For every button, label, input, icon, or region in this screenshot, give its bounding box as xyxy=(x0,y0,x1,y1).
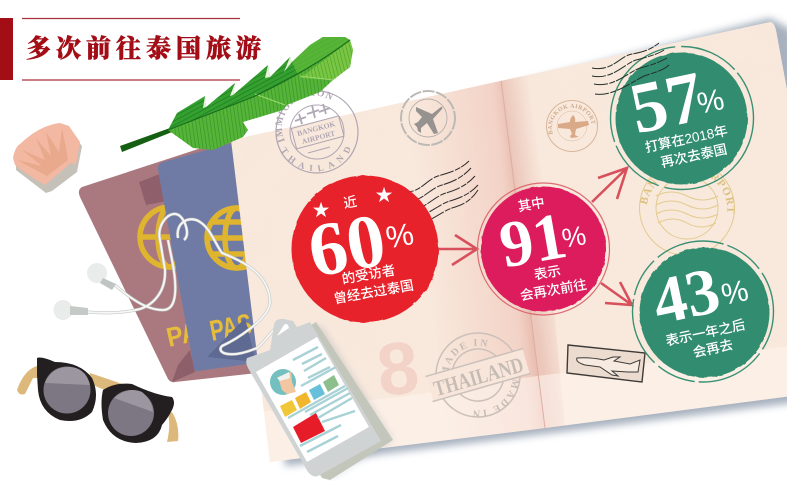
91 percent: 91 xyxy=(494,199,572,282)
leaf lower tip xyxy=(300,40,353,80)
green ring xyxy=(632,241,774,382)
green circle xyxy=(640,248,770,378)
43 percent: % xyxy=(718,274,751,312)
green caption: 再次去泰国 xyxy=(659,141,729,170)
leaf notches xyxy=(203,57,292,108)
stamp: yellow wave xyxy=(639,172,735,255)
red caption xyxy=(329,259,415,306)
earphone cable xyxy=(88,214,288,354)
stamp: made in Thailand xyxy=(425,332,531,418)
red tab xyxy=(0,18,13,80)
profile lines xyxy=(293,347,336,386)
stamp: made in Thailand: THAILAND xyxy=(431,352,526,401)
postmark: near red circle xyxy=(400,161,478,224)
left earbud xyxy=(87,263,107,283)
near label: 近 xyxy=(342,194,359,211)
green circle xyxy=(616,52,748,184)
stat: 57% xyxy=(592,43,754,190)
page base xyxy=(231,22,787,462)
stat: near 60% xyxy=(292,176,438,322)
stat: near 60%: ★ xyxy=(375,183,393,207)
red caption: 曾经去过泰国 xyxy=(332,277,415,306)
stamp: grey plane xyxy=(401,91,455,145)
red passport label: PA xyxy=(164,316,202,353)
stat: 91% xyxy=(478,183,610,315)
stamp: tan plane: BANGKOK AIRPORT xyxy=(548,104,596,135)
leaf lower half xyxy=(168,40,353,150)
icon: earphones xyxy=(54,214,288,354)
passport: blue xyxy=(158,143,267,371)
stamp: made in Thailand: MADE IN xyxy=(474,380,519,416)
blue passport label: PAS xyxy=(207,308,255,348)
left page gutter xyxy=(437,80,544,430)
stamp: plane ticket xyxy=(567,345,645,382)
frame xyxy=(37,358,96,421)
icon: blue passport globe xyxy=(204,205,247,271)
spine line xyxy=(500,80,546,428)
arrows xyxy=(436,168,632,305)
arrow: pink to 43 xyxy=(601,282,632,305)
leaf stem xyxy=(120,128,172,152)
color tiles xyxy=(280,400,297,417)
icon: seashell xyxy=(13,123,82,193)
stamp: Bangkok Airport immigration: BANGKOK xyxy=(296,119,336,138)
stamp: tan plane xyxy=(546,100,598,152)
pink caption: 表示 xyxy=(533,262,562,283)
phone shadow xyxy=(262,325,392,478)
43 percent: 43 xyxy=(646,254,726,339)
green ring xyxy=(610,46,754,190)
lenses xyxy=(44,366,90,414)
icon: phone with profile screen xyxy=(246,319,393,480)
pink circle xyxy=(481,186,606,312)
57 percent: 57 xyxy=(623,56,710,149)
green caption xyxy=(664,316,750,365)
green caption xyxy=(643,122,733,173)
title text: 多次前往泰国旅游 xyxy=(26,34,266,63)
lower fold xyxy=(260,345,787,470)
phone screen xyxy=(256,337,369,462)
title rules xyxy=(22,18,240,80)
stamp: yellow wave: BANGKOK AIRPORT xyxy=(640,174,735,214)
leaf midrib xyxy=(168,40,350,130)
stamp: made in Thailand: MADE IN xyxy=(442,339,488,370)
stamp: Bangkok Airport immigration: AIRPORT xyxy=(301,129,336,146)
stars: ★ xyxy=(312,198,330,222)
pink caption: 会再次前往 xyxy=(519,276,588,303)
icon: red passport globe xyxy=(137,204,176,270)
upper label: 其中 xyxy=(517,195,546,214)
pink caption xyxy=(516,258,588,303)
postmark: over green circle xyxy=(592,43,669,94)
green caption: 会再去 xyxy=(691,336,734,360)
leaf upper tip highlight xyxy=(292,37,350,75)
phone back xyxy=(255,322,393,480)
page shadow xyxy=(262,18,787,466)
pink ring xyxy=(478,183,610,315)
profile avatar xyxy=(270,369,296,395)
green caption: 打算在2018年 xyxy=(643,122,729,155)
stamp: Bangkok Airport immigration xyxy=(275,90,359,174)
phone body xyxy=(246,319,381,476)
stamp: Bangkok Airport immigration: IMMIGRATION xyxy=(275,90,333,143)
red circle xyxy=(292,176,438,322)
passport: red xyxy=(78,142,252,382)
title block xyxy=(0,18,266,80)
number 8 stamp: 8 xyxy=(373,325,423,412)
leaf upper half xyxy=(168,37,350,130)
right page gutter xyxy=(502,76,562,428)
red image tile xyxy=(293,413,325,443)
passport pages xyxy=(220,10,787,470)
stamp: Bangkok Airport immigration: THAILAND xyxy=(282,147,350,172)
43 percent xyxy=(646,248,754,339)
stat: 43% xyxy=(632,241,774,382)
temple arms xyxy=(17,366,178,442)
arrow: red to pink xyxy=(436,235,477,265)
91 percent: % xyxy=(560,220,588,254)
green caption: 表示一年之后 xyxy=(664,316,747,349)
right earbud xyxy=(54,300,72,320)
60 percent: 60 xyxy=(302,198,392,294)
article lines xyxy=(288,386,355,452)
arrow: pink to 57 xyxy=(592,168,627,202)
paper marbling xyxy=(220,10,787,470)
red caption: 的受访者 xyxy=(340,262,396,287)
57 percent: % xyxy=(694,83,727,121)
leaf seams xyxy=(255,76,333,105)
60 percent: % xyxy=(383,216,416,255)
icon: sunglasses xyxy=(17,358,178,443)
icon: banana leaf xyxy=(120,37,353,152)
